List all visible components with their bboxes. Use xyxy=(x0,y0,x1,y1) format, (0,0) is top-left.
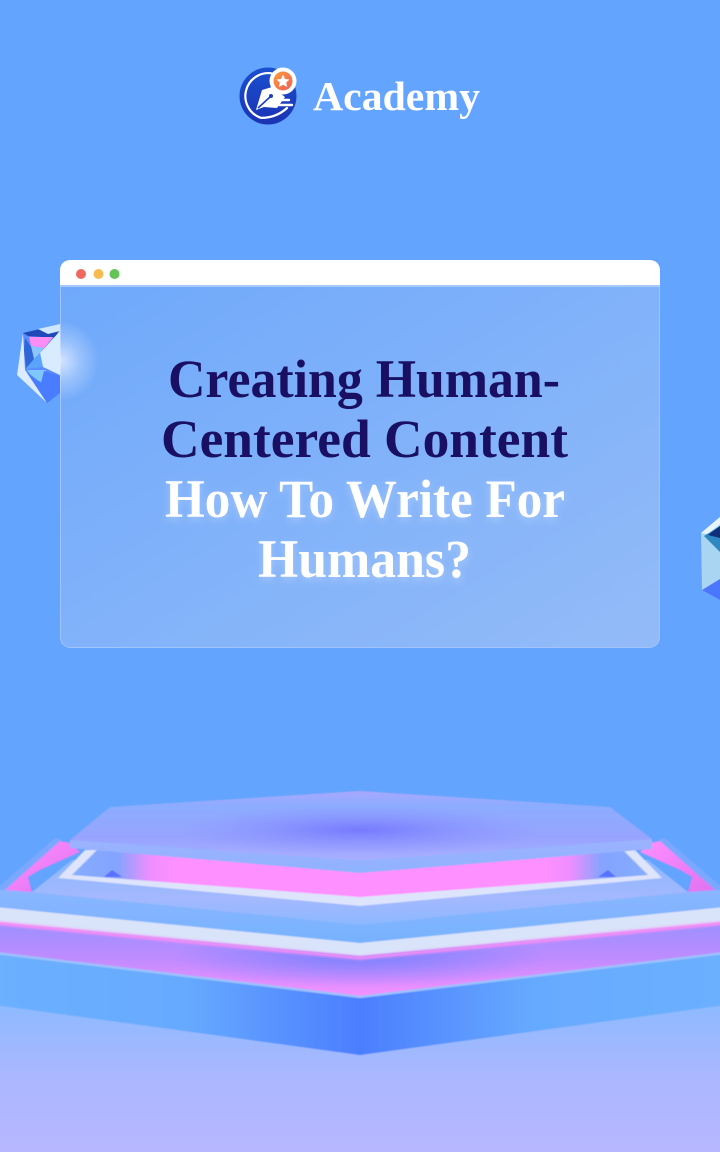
recess shadow left xyxy=(104,870,122,877)
title xyxy=(161,349,568,589)
pink step face xyxy=(0,922,720,997)
podium front face xyxy=(0,953,720,1055)
pink step center shading xyxy=(170,923,550,987)
recess shadow right xyxy=(598,870,616,877)
title line 2: Centered Content xyxy=(161,409,568,469)
window title bar xyxy=(60,260,660,285)
logo wordmark: Academy xyxy=(313,73,481,119)
left gem xyxy=(17,324,60,403)
outer right rim xyxy=(658,838,720,890)
outer left pink wall xyxy=(5,841,80,892)
plate center shading xyxy=(175,805,545,855)
pink glow under white band xyxy=(0,923,720,958)
inner white frame xyxy=(58,850,662,906)
pink step rim highlight xyxy=(0,953,720,997)
podium xyxy=(0,791,720,1152)
inner pink recess xyxy=(72,850,648,898)
second step ledge xyxy=(0,888,720,945)
glow at panel edge xyxy=(60,326,95,396)
outer left rim xyxy=(0,838,62,890)
top plate side xyxy=(70,839,652,873)
panel body xyxy=(60,284,660,648)
top plate surface xyxy=(70,791,652,860)
right gem xyxy=(701,517,720,600)
logo icon: pen nib in circle with star badge xyxy=(240,68,296,124)
inner step surface xyxy=(32,860,688,925)
floor xyxy=(0,1005,720,1152)
title line 1: Creating Human- xyxy=(168,349,560,409)
white step band xyxy=(0,907,720,956)
panel top highlight xyxy=(60,285,660,287)
browser window panel xyxy=(23,260,660,648)
title line 3: How To Write For xyxy=(165,469,565,529)
outer right pink wall xyxy=(640,841,715,892)
logo xyxy=(240,68,481,124)
window control dots xyxy=(76,269,120,279)
title line 4: Humans? xyxy=(258,529,471,589)
